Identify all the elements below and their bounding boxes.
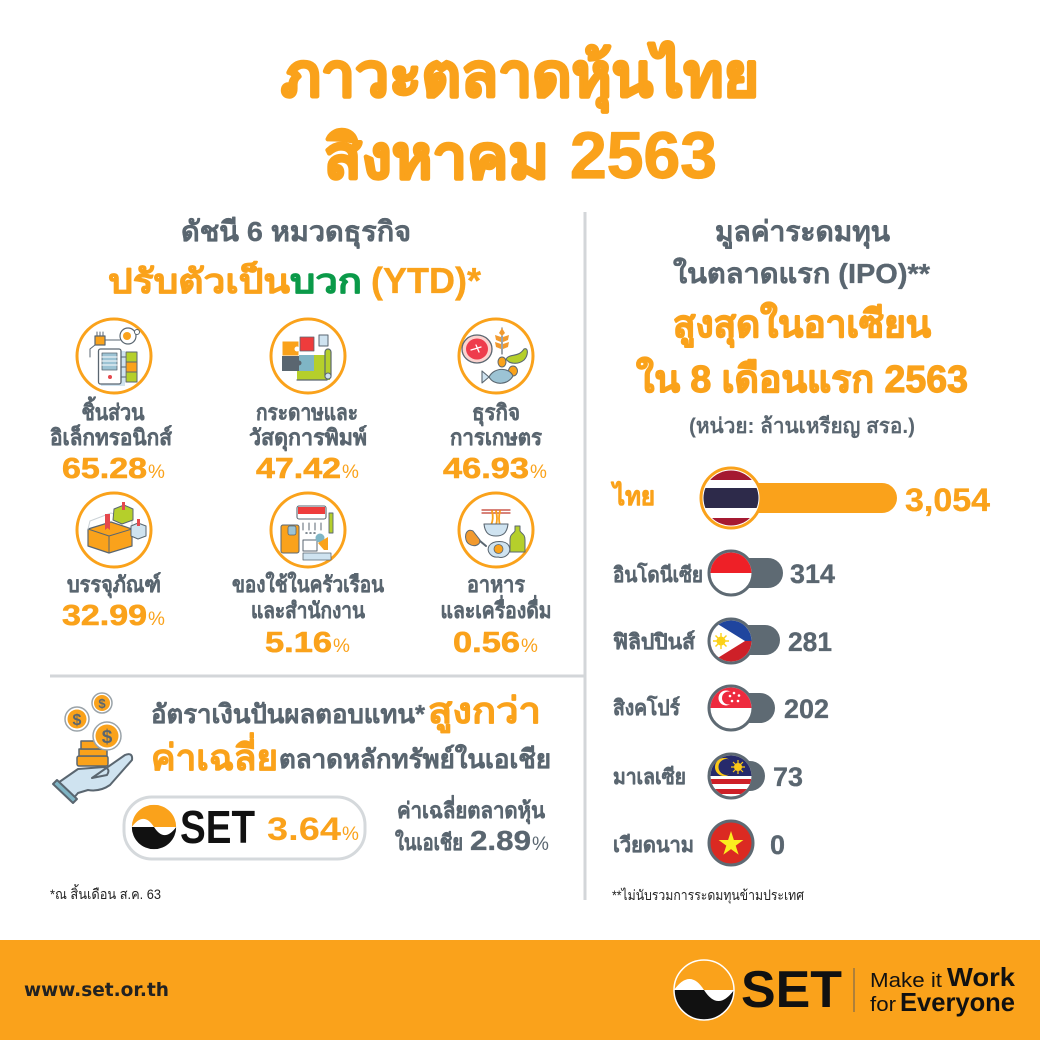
bar: Vietnam [613,821,785,865]
sector labels and values: % [148,609,165,630]
heading: six sector indices [108,216,481,301]
icon: packaging [77,493,151,567]
footer logo: for [870,994,896,1016]
sector labels and values: % [333,636,350,657]
icon: hand holding coins [53,693,132,803]
sector labels and values [50,396,552,659]
heading: six sector indices: (YTD)* [371,260,481,301]
SET yield pill: SET [180,801,255,853]
heading: IPO fund raising: ใน 8 เดือนแรก 2563 [636,357,968,401]
bar: Malaysia: 73 [773,762,803,792]
icon: electronics [77,319,151,393]
dividend yield headline: ค่าเฉลี่ย [151,732,278,778]
SET yield pill: 3.64 [267,811,341,847]
bar: Malaysia [613,753,803,798]
Asia average yield: 2.89 [470,825,531,856]
sector labels and values: % [342,462,359,483]
sector labels and values: 46.93 [443,453,529,485]
sector labels and values: % [530,462,547,483]
website: www.set.or.th [24,979,169,1001]
dividend yield headline: สูงกว่า [428,690,541,734]
icon: hand holding coins: $ [102,727,113,748]
bar: Vietnam: 0 [770,830,785,860]
bar: Vietnam: เวียดนาม [613,833,694,857]
footer logo: Make it [870,970,942,992]
dividend yield headline: อัตราเงินปันผลตอบแทน* [151,699,426,729]
sector labels and values: วัสดุการพิมพ์ [249,425,367,452]
sector labels and values: % [521,636,538,657]
bar: Singapore: สิงคโปร์ [613,695,681,720]
sector labels and values: กระดาษและ [256,400,358,425]
footer logo [674,960,1016,1020]
sector labels and values: ของใช้ในครัวเรือน [232,571,384,597]
bar: Thailand: ไทย [610,480,655,511]
footer logo: Everyone [900,987,1015,1017]
footnote right: **ไม่นับรวมการระดมทุนข้ามประเทศ [612,887,804,904]
icon: agriculture [459,319,533,393]
icon: household and office [271,493,345,567]
SET yield pill [124,797,365,859]
bar: Philippines [612,618,832,664]
sector labels and values: และเครื่องดื่ม [440,594,552,623]
sector labels and values: 47.42 [256,453,341,485]
icon: paper and printing [271,319,345,393]
sector labels and values: อาหาร [467,572,525,597]
title: สิงหาคม [324,124,549,191]
bar: Thailand [610,468,990,530]
sector labels and values: 65.28 [62,453,147,485]
sector labels and values: 5.16 [265,627,332,659]
heading: IPO fund raising: มูลค่าระดมทุน [715,216,890,249]
bar: Indonesia: อินโดนีเซีย [613,562,703,587]
title [281,40,759,192]
icon: hand holding coins: $ [98,696,106,711]
footer logo: SET [741,961,842,1019]
sector labels and values: 32.99 [62,600,147,632]
bar: Malaysia: มาเลเซีย [613,765,686,789]
Asia average yield: ในเอเชีย [395,829,463,855]
bar: Philippines: ฟิลิปปินส์ [612,630,695,654]
dividend yield headline: ตลาดหลักทรัพย์ในเอเชีย [279,744,551,774]
bar: Singapore [613,685,829,730]
bar: Philippines: 281 [788,627,832,657]
sector labels and values: 0.56 [453,627,520,659]
title: ภาวะตลาดหุ้นไทย [281,40,759,113]
dividend yield headline [151,690,551,778]
title: 2563 [570,118,717,192]
heading: six sector indices: บวก [290,263,362,301]
sector labels and values: ชิ้นส่วน [82,396,144,425]
heading: six sector indices: ดัชนี 6 หมวดธุรกิจ [181,216,411,249]
bar: Indonesia [613,550,835,595]
bar: Indonesia: 314 [790,559,835,589]
Asia average yield: % [532,834,549,855]
Asia average yield [395,794,549,856]
bar: Thailand: 3,054 [905,482,990,518]
SET yield pill: % [342,824,359,845]
bar: Singapore: 202 [784,694,829,724]
sector labels and values: ธุรกิจ [472,400,520,427]
heading: IPO fund raising [636,216,968,439]
heading: six sector indices: ปรับตัวเป็น [108,260,290,301]
footer band [0,940,1040,1040]
icon: food and beverage [459,493,533,567]
sector labels and values: และสำนักงาน [251,598,365,623]
heading: IPO fund raising: สูงสุดในอาเซียน [673,302,931,348]
footer logo: Work [947,962,1016,992]
sector labels and values: อิเล็กทรอนิกส์ [50,423,173,450]
sector labels and values: % [148,462,165,483]
Asia average yield: ค่าเฉลี่ยตลาดหุ้น [397,794,545,825]
sector labels and values: บรรจุภัณฑ์ [67,572,161,599]
icon: hand holding coins: $ [73,712,82,729]
heading: IPO fund raising: ในตลาดแรก (IPO)** [673,257,930,289]
heading: IPO fund raising: (หน่วย: ล้านเหรียญ สรอ.) [689,414,915,439]
footnote left: *ณ สิ้นเดือน ส.ค. 63 [50,884,161,902]
sector labels and values: การเกษตร [450,425,542,450]
